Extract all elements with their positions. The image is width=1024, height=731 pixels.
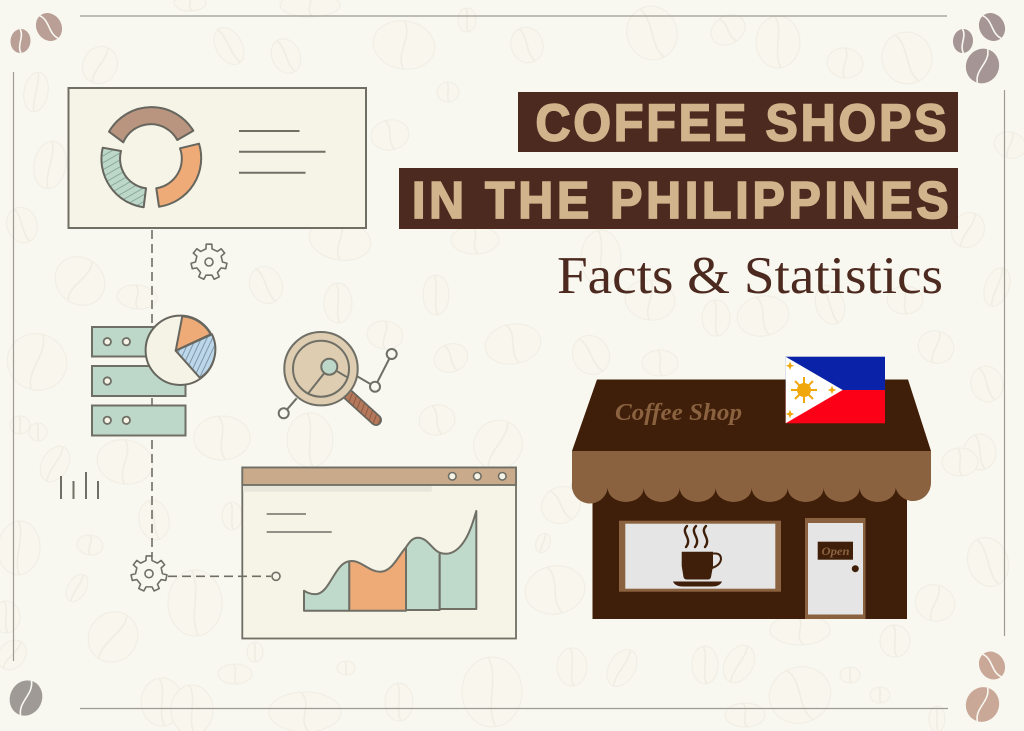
magnifier handle [347,393,376,420]
area chart [304,511,476,611]
shop building [592,451,907,619]
shop window with coffee cup [619,521,781,592]
pie chart [146,316,215,385]
title line 2: IN THE PHILIPPINES [412,171,949,229]
coffee cup [673,526,722,586]
panel: browser window with area chart [242,468,516,638]
decorative corner bean: bottom left [4,675,48,721]
icon: gear bottom [131,556,167,591]
decorative corner beans: bottom right [960,647,1010,727]
roof sign text: Coffee Shop [615,400,742,426]
decorative corner beans: top left [9,8,67,54]
shop roof [572,380,931,451]
icon: Philippine flag [786,357,885,423]
awning [572,451,931,504]
illustration: coffee shop [572,380,931,619]
decorative corner beans: top right [952,8,1010,89]
icon: server stack with pie chart [92,316,215,436]
dashed connector line: vertical [151,230,153,557]
icon: magnifying glass with network [279,332,397,420]
title line 1: COFFEE SHOPS [536,94,947,152]
icon: small bars [61,472,98,499]
donut chart [101,107,201,207]
shop door [805,518,866,619]
shop door: Open [822,544,850,558]
text placeholder lines [239,131,326,173]
flag sun [791,377,817,403]
flag stars [786,362,836,418]
subtitle: Facts & Statistics [557,247,943,305]
icon: gear top [191,244,227,279]
dashed connector line: horizontal with end node [168,572,280,580]
panel: donut chart card [68,88,366,228]
